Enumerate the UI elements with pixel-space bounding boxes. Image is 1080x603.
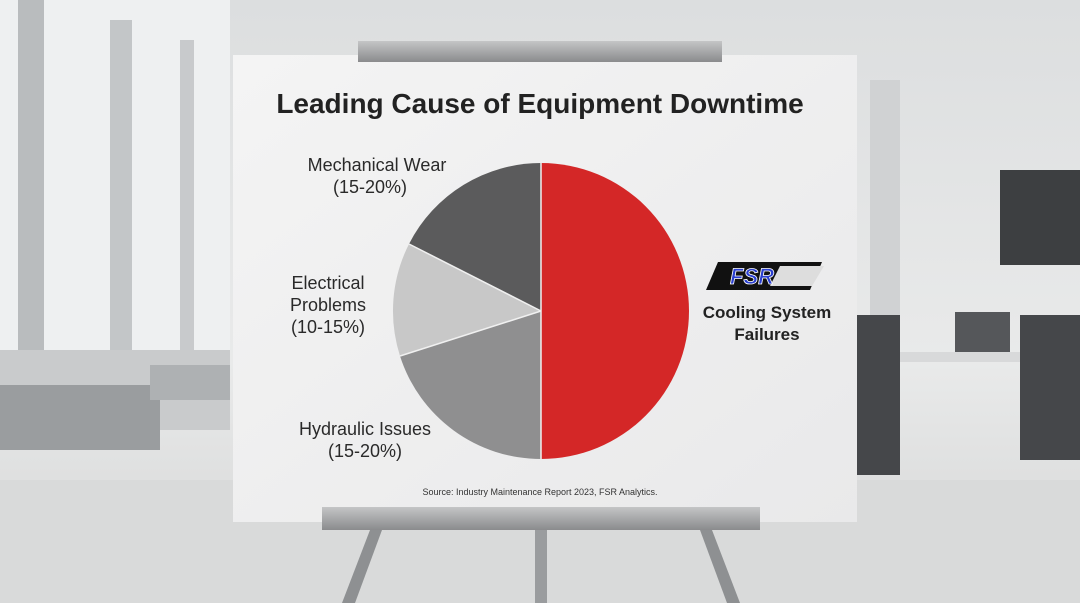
label: mechanical wear: (15-20%) <box>333 177 407 197</box>
label: hydraulic issues: (15-20%) <box>328 441 402 461</box>
label: electrical problems: Problems <box>290 295 366 315</box>
title: Leading Cause of Equipment Downtime <box>276 88 804 119</box>
easel ledge <box>322 507 760 530</box>
whiteboard <box>233 41 857 522</box>
top clamp <box>358 41 722 62</box>
icon: FSR logo <box>706 262 824 290</box>
pie chart <box>393 163 689 459</box>
label: cooling system failures: Cooling System <box>703 303 831 322</box>
label: electrical problems: (10-15%) <box>291 317 365 337</box>
label: electrical problems: Electrical <box>291 273 365 293</box>
label: cooling system failures: Failures <box>734 325 800 344</box>
label: hydraulic issues: Hydraulic Issues <box>299 419 431 439</box>
source: Source: Industry Maintenance Report 2023, FSR Analytics. <box>422 487 658 497</box>
label: mechanical wear: Mechanical Wear <box>308 155 446 175</box>
easel legs <box>342 530 740 603</box>
icon: FSR logo: FSR <box>730 264 774 289</box>
